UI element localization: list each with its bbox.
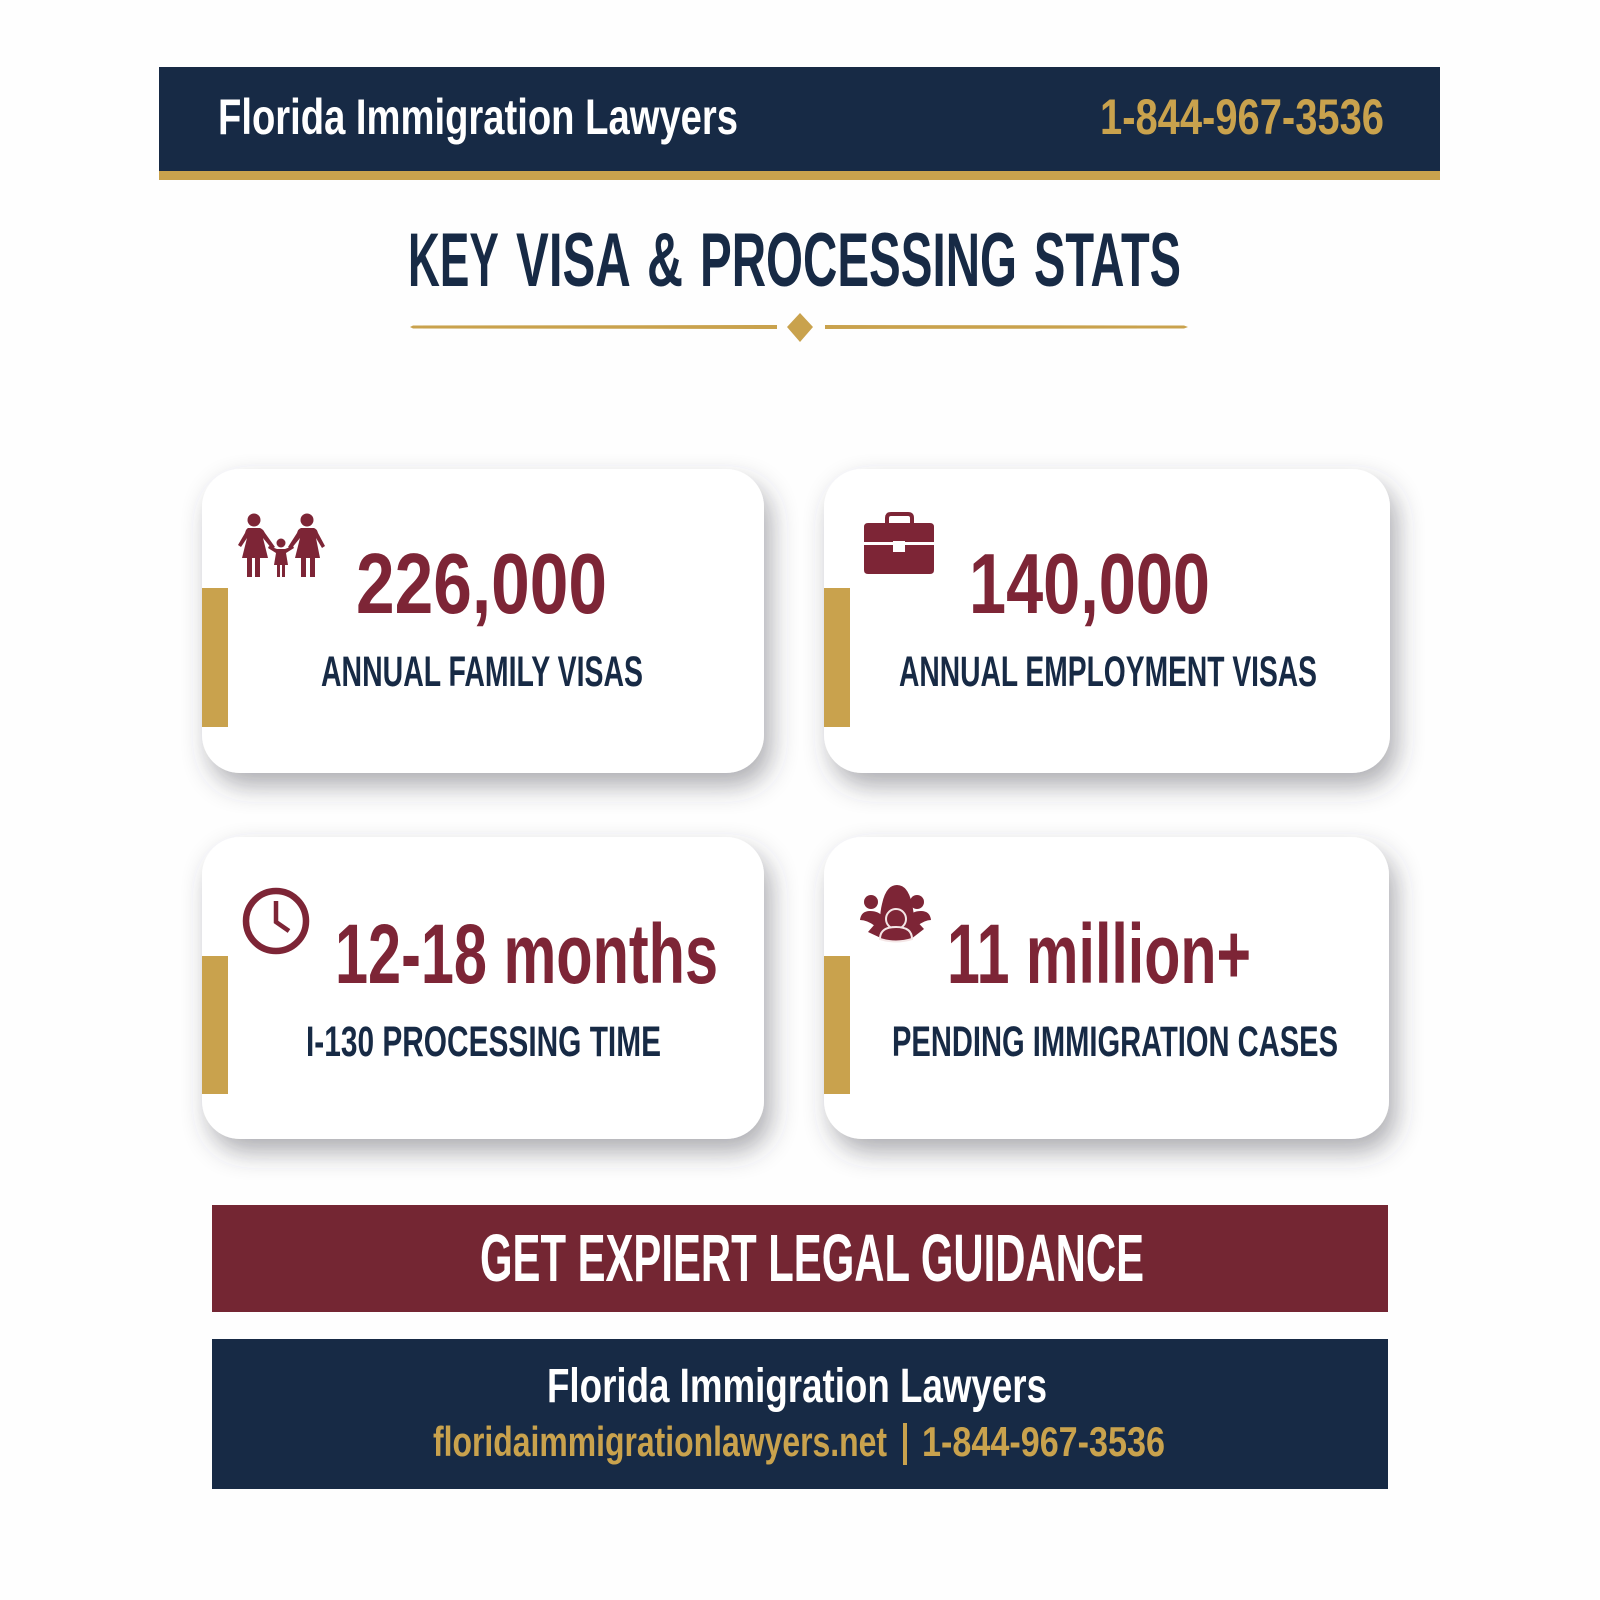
card: annual employment visas [824,469,1390,773]
stat label: ANNUAL FAMILY VISAS [321,648,643,696]
icon: family [238,514,325,577]
title: STATS [1034,218,1181,303]
icon: group of people [860,885,931,942]
title divider with diamond [410,313,1188,342]
stat label: ANNUAL EMPLOYMENT VISAS [899,648,1317,696]
title: PROCESSING [700,218,1017,303]
footer phone number: 1-844-967-3536 [922,1418,1165,1465]
stat value: 140,000 [969,537,1210,632]
icon: clock [246,891,306,951]
header bar [159,67,1440,180]
call-to-action banner [212,1205,1388,1312]
card: annual family visas [202,469,764,773]
stat label: PENDING IMMIGRATION CASES [892,1018,1338,1066]
stat label: I-130 PROCESSING TIME [306,1018,661,1066]
stat value: 12-18 months [335,907,718,1001]
title: VISA [516,218,630,303]
footer panel [212,1339,1388,1489]
call-to-action text: GET EXPIERT LEGAL GUIDANCE [480,1221,1144,1296]
gold accent bar [202,588,228,727]
gold accent bar [824,588,850,727]
stat value: 226,000 [356,537,607,632]
title: & [647,218,683,303]
card: pending immigration cases [824,837,1389,1139]
gold accent bar [824,956,850,1094]
footer website: floridaimmigrationlawyers.net [433,1418,887,1465]
gold accent bar [202,956,228,1094]
stat value: 11 million+ [947,907,1251,1001]
header phone number: 1-844-967-3536 [1100,89,1384,145]
icon: briefcase [864,514,934,574]
card: I-130 processing time [202,837,764,1139]
title: KEY [408,218,498,303]
footer separator [903,1423,907,1465]
footer firm name: Florida Immigration Lawyers [547,1360,1047,1413]
header firm name: Florida Immigration Lawyers [218,89,738,145]
